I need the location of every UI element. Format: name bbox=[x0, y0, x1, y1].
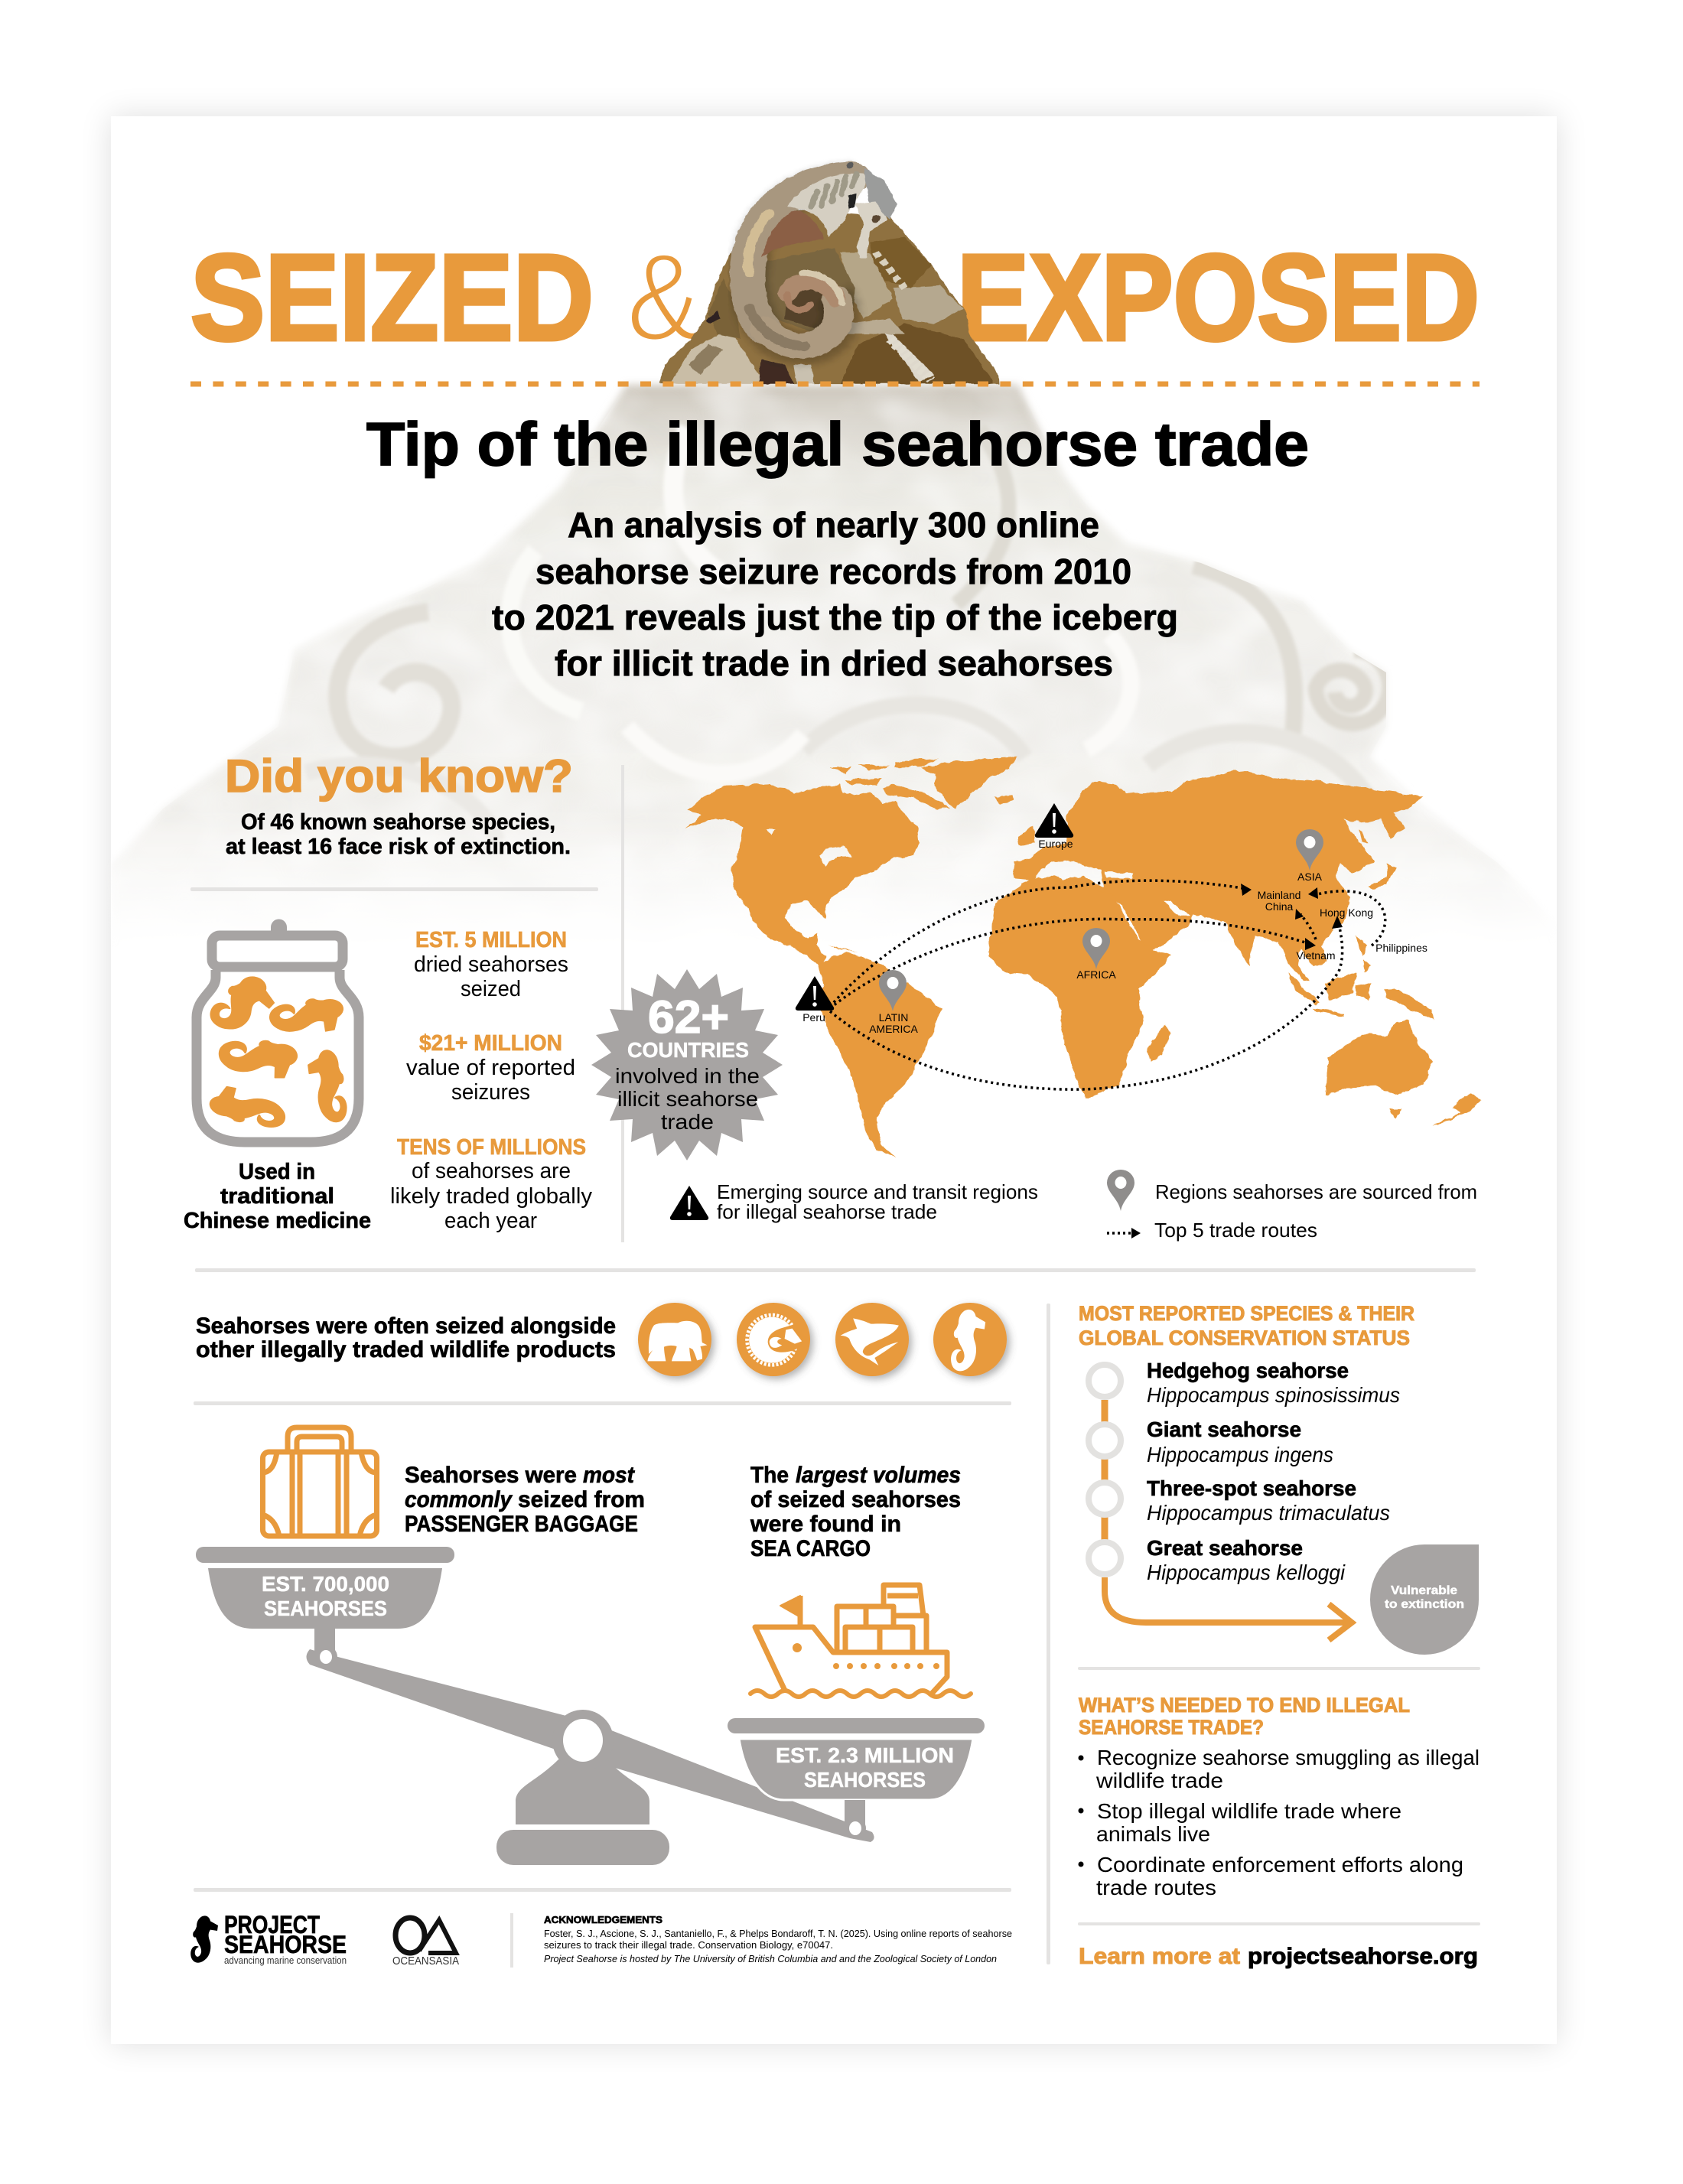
species list: Hippocampus ingens bbox=[1147, 1443, 1333, 1466]
scale beam bbox=[306, 1649, 874, 1842]
map: place labels: AMERICA bbox=[869, 1023, 919, 1035]
subtitle: Tip of the illegal seahorse trade bbox=[366, 410, 1309, 478]
call to action: learn more bbox=[1079, 1944, 1478, 1969]
text: passenger baggage: Seahorses were bbox=[405, 1463, 577, 1488]
dashed divider under title bbox=[190, 381, 1480, 387]
text: sea cargo: of seized seahorses bbox=[750, 1487, 961, 1512]
map: top trade routes bbox=[830, 880, 1385, 1089]
stat: est 5 million: dried seahorses bbox=[414, 952, 568, 977]
map: place labels: Peru bbox=[802, 1011, 825, 1024]
title: Seized & Exposed: EXPOSED bbox=[957, 229, 1480, 366]
stat: tens of millions: likely traded globally bbox=[390, 1184, 592, 1209]
seahorse shadow bbox=[750, 180, 854, 348]
species list: Hippocampus kelloggi bbox=[1147, 1561, 1346, 1584]
stat: tens of millions: each year bbox=[444, 1209, 537, 1233]
legend: source regions: Regions seahorses are sourced from bbox=[1155, 1180, 1477, 1203]
intro text block: for illicit trade in dried seahorses bbox=[555, 643, 1113, 683]
badge: 62+ countries: trade bbox=[661, 1110, 714, 1134]
species list: Three-spot seahorse bbox=[1147, 1476, 1356, 1500]
chart: balance scale bbox=[196, 1547, 985, 1865]
map: place labels: Europe bbox=[1038, 838, 1073, 850]
text: species at risk bbox=[226, 810, 571, 859]
text: sea cargo: were found in bbox=[750, 1512, 901, 1537]
text: species at risk: at least 16 face risk of extinction. bbox=[226, 835, 571, 859]
legend: emerging regions bbox=[670, 1180, 1038, 1223]
image: dried seahorse on tip of the pile bbox=[659, 163, 999, 384]
list: actions to end illegal trade: Coordinate enforcement efforts along bbox=[1097, 1853, 1463, 1876]
icon: seahorse bbox=[951, 1310, 985, 1371]
heading: most reported species: MOST REPORTED SPECIES & THEIR bbox=[1079, 1302, 1414, 1325]
left pan: est 700,000 seahorses: EST. 700,000 bbox=[262, 1572, 389, 1596]
text: sea cargo: The bbox=[750, 1463, 789, 1488]
text: passenger baggage: most bbox=[583, 1463, 636, 1488]
legend: emerging regions: Emerging source and transit regions bbox=[717, 1180, 1038, 1203]
text: passenger baggage bbox=[405, 1463, 645, 1537]
icon: jar of seahorses bbox=[197, 919, 359, 1142]
acknowledgements: Project Seahorse is hosted by The University of British Columbia and and the Zoological Society of London bbox=[544, 1953, 997, 1964]
acknowledgements: Foster, S. J., Ascione, S. J., Santaniello, F., & Phelps Bondaroff, T. N. (2025). Using online reports of seahorse bbox=[544, 1928, 1012, 1939]
arrow to status bbox=[1105, 1577, 1352, 1640]
heading: what's needed bbox=[1079, 1694, 1410, 1739]
badge: 62+ countries: illicit seahorse bbox=[617, 1087, 758, 1111]
map: place labels bbox=[802, 838, 1427, 1035]
icon: pangolin bbox=[747, 1315, 807, 1365]
stat: 21 million value: seizures bbox=[451, 1080, 530, 1105]
heading: most reported species bbox=[1079, 1302, 1414, 1349]
stat: tens of millions: of seahorses are bbox=[412, 1159, 571, 1183]
list: actions to end illegal trade: animals live bbox=[1096, 1822, 1210, 1846]
list: actions to end illegal trade: Stop illegal wildlife trade where bbox=[1097, 1799, 1401, 1823]
world map bbox=[686, 757, 1480, 1157]
heading: what's needed: WHAT’S NEEDED TO END ILLEGAL bbox=[1079, 1694, 1410, 1717]
title: Seized & Exposed: SEIZED bbox=[190, 229, 594, 366]
acknowledgements bbox=[544, 1914, 1012, 1964]
text: species at risk: Of 46 known seahorse species, bbox=[241, 810, 555, 835]
text: sea cargo bbox=[750, 1463, 961, 1561]
logo: oceans asia: OCEANSASIA bbox=[392, 1955, 459, 1968]
diagram: species timeline to vulnerable bbox=[1089, 1365, 1479, 1655]
species list: Hippocampus trimaculatus bbox=[1147, 1501, 1390, 1525]
title: Seized & Exposed bbox=[190, 228, 1480, 366]
logo: oceans asia bbox=[392, 1918, 459, 1968]
heading: most reported species: GLOBAL CONSERVATION STATUS bbox=[1079, 1326, 1410, 1349]
badge: 62+ countries: COUNTRIES bbox=[627, 1038, 749, 1062]
logo: project seahorse: SEAHORSE bbox=[224, 1931, 347, 1958]
icon: shark bbox=[841, 1318, 899, 1365]
list: actions to end illegal trade: trade routes bbox=[1096, 1876, 1216, 1899]
caption: traditional Chinese medicine: Used in bbox=[239, 1160, 315, 1184]
caption: traditional Chinese medicine bbox=[184, 1160, 371, 1233]
list: actions to end illegal trade bbox=[1079, 1746, 1480, 1899]
call to action: learn more: projectseahorse.org bbox=[1248, 1944, 1478, 1969]
caption: traditional Chinese medicine: traditional bbox=[220, 1184, 334, 1209]
stat: 21 million value: $21+ MILLION bbox=[419, 1031, 562, 1056]
text: passenger baggage: commonly bbox=[405, 1487, 513, 1512]
map: place labels: Hong Kong bbox=[1320, 906, 1373, 919]
scale base bbox=[516, 1759, 649, 1824]
map: pins and warnings bbox=[796, 803, 1323, 1011]
logo: project seahorse: PROJECT bbox=[224, 1911, 320, 1938]
list: actions to end illegal trade: Recognize seahorse smuggling as illegal bbox=[1097, 1746, 1480, 1769]
text: passenger baggage: PASSENGER BAGGAGE bbox=[405, 1512, 638, 1537]
legend: trade routes: Top 5 trade routes bbox=[1154, 1219, 1317, 1242]
icon: cargo ship bbox=[750, 1585, 971, 1697]
intro text block bbox=[492, 505, 1178, 683]
acknowledgements: seizures to track their illegal trade. Conservation Biology, e70047. bbox=[544, 1939, 833, 1951]
caption: traditional Chinese medicine: Chinese medicine bbox=[184, 1209, 371, 1233]
status badge: vulnerable to extinction: to extinction bbox=[1385, 1598, 1464, 1611]
map: place labels: LATIN bbox=[879, 1011, 908, 1024]
panel: did you know bbox=[225, 750, 573, 859]
map: place labels: ASIA bbox=[1297, 871, 1323, 883]
stat: tens of millions: TENS OF MILLIONS bbox=[397, 1135, 586, 1160]
species list: Hedgehog seahorse bbox=[1147, 1359, 1349, 1382]
badge: 62+ countries bbox=[591, 969, 783, 1160]
legend: emerging regions: for illegal seahorse trade bbox=[717, 1200, 937, 1223]
stat: est 5 million: EST. 5 MILLION bbox=[415, 928, 567, 952]
logo: project seahorse: advancing marine conservation bbox=[224, 1955, 347, 1966]
intro text block: to 2021 reveals just the tip of the iceberg bbox=[492, 597, 1178, 637]
species list: Hippocampus spinosissimus bbox=[1147, 1383, 1400, 1407]
acknowledgements: ACKNOWLEDGEMENTS bbox=[544, 1914, 662, 1925]
title: Seized & Exposed: & bbox=[627, 228, 702, 366]
right pan: est 2.3 million seahorses: SEAHORSES bbox=[804, 1768, 926, 1792]
map: place labels: AFRICA bbox=[1076, 968, 1116, 981]
icon: suitcase bbox=[262, 1427, 376, 1536]
text: seized alongside: other illegally traded wildlife products bbox=[196, 1337, 616, 1362]
stat: est 5 million: seized bbox=[461, 977, 521, 1001]
heading: what's needed: SEAHORSE TRADE? bbox=[1079, 1716, 1264, 1739]
species list: Great seahorse bbox=[1147, 1536, 1303, 1560]
icons: other wildlife products bbox=[638, 1303, 1007, 1376]
text: seized alongside bbox=[196, 1313, 616, 1362]
list: actions to end illegal trade: wildlife trade bbox=[1095, 1769, 1223, 1792]
right pan: est 2.3 million seahorses: EST. 2.3 MILLION bbox=[776, 1743, 954, 1767]
species list bbox=[1147, 1359, 1400, 1584]
status badge: vulnerable to extinction: Vulnerable bbox=[1391, 1584, 1457, 1597]
legend: source regions bbox=[1107, 1170, 1477, 1211]
heading: did you know: Did you know? bbox=[225, 750, 573, 802]
right pan: est 2.3 million seahorses bbox=[728, 1718, 985, 1839]
status badge: vulnerable to extinction bbox=[1370, 1544, 1479, 1655]
stat: 21 million value bbox=[406, 1031, 575, 1105]
badge: 62+ countries: 62+ bbox=[648, 991, 729, 1043]
intro text block: An analysis of nearly 300 online bbox=[568, 505, 1099, 545]
background: faded pile of seahorses bbox=[119, 381, 1505, 887]
left pan: est 700,000 seahorses bbox=[196, 1547, 454, 1655]
left pan: est 700,000 seahorses: SEAHORSES bbox=[264, 1597, 387, 1620]
icon: elephant bbox=[647, 1321, 707, 1361]
stat: est 5 million bbox=[414, 928, 568, 1001]
stat: 21 million value: value of reported bbox=[406, 1056, 575, 1080]
text: passenger baggage: seized from bbox=[518, 1487, 645, 1512]
stat: tens of millions bbox=[390, 1135, 592, 1233]
text: seized alongside: Seahorses were often seized alongside bbox=[196, 1313, 616, 1339]
call to action: learn more: Learn more at bbox=[1079, 1944, 1240, 1969]
badge: 62+ countries: involved in the bbox=[615, 1064, 760, 1088]
text: sea cargo: largest volumes bbox=[796, 1463, 961, 1488]
text: sea cargo: SEA CARGO bbox=[750, 1536, 871, 1561]
intro text block: seahorse seizure records from 2010 bbox=[536, 552, 1131, 591]
map: place labels: Philippines bbox=[1375, 942, 1427, 954]
map: place labels: Mainland bbox=[1258, 889, 1300, 901]
logo: project seahorse bbox=[190, 1911, 347, 1966]
species list: Giant seahorse bbox=[1147, 1417, 1301, 1441]
map: place labels: China bbox=[1265, 900, 1293, 913]
map: place labels: Vietnam bbox=[1296, 949, 1336, 962]
